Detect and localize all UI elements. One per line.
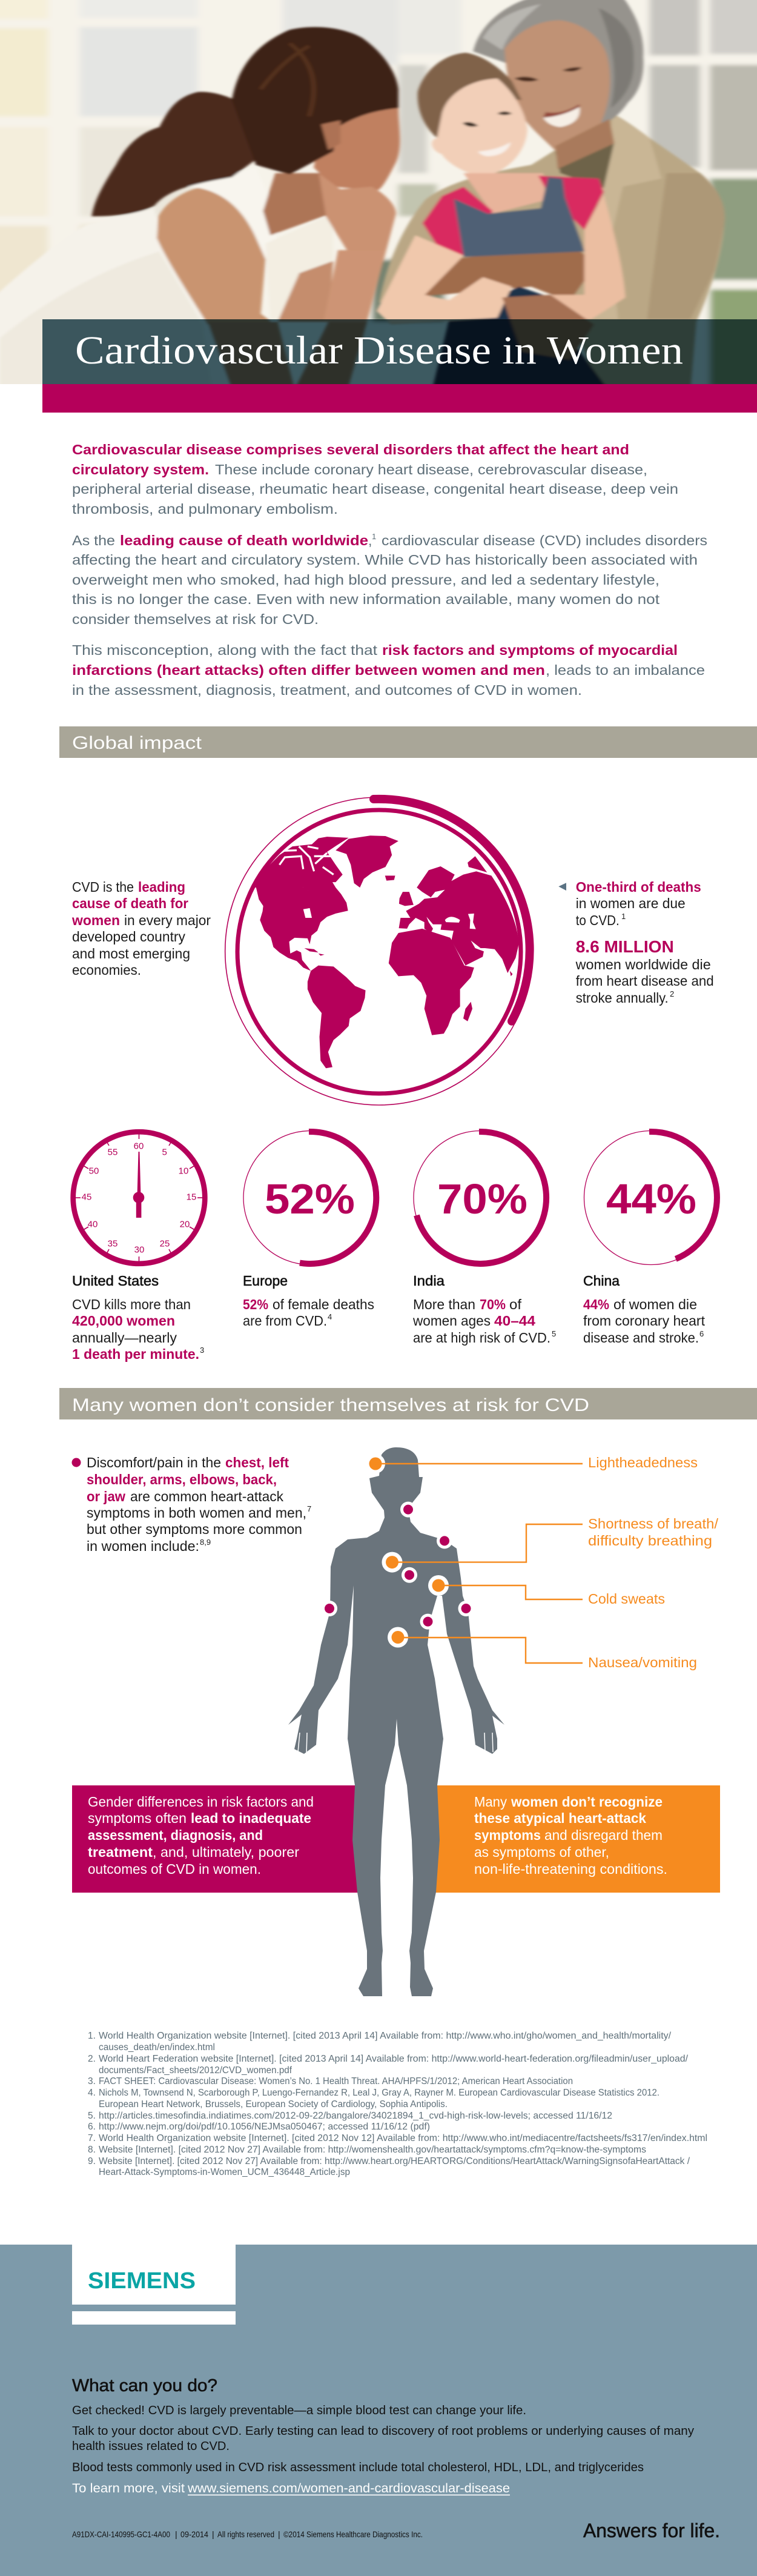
magenta band [42, 384, 757, 413]
chart: United States stopwatch [73, 1132, 205, 1264]
text: leading cause of death: in every major [124, 912, 211, 928]
child hair [418, 53, 521, 138]
paragraph 2: consider themselves at risk for CVD. [72, 611, 319, 627]
paragraph 1 [72, 442, 678, 517]
icon: pointer arrow [558, 883, 566, 891]
mother ponytail [92, 92, 263, 216]
child pink shirt [423, 187, 492, 257]
paragraph 2: affecting the heart and circulatory system. While CVD has historically been associated with [72, 552, 698, 568]
mother arm and shoulder [157, 185, 276, 325]
legal line: A91DX-CAI-140995-GC1-4A00 [72, 2529, 170, 2539]
title banner overlay [42, 319, 757, 384]
text: leading cause of death [71, 879, 211, 978]
text: leading cause of death: cause of death for [72, 895, 188, 911]
callout: one-third of deaths: women worldwide die [575, 957, 711, 972]
one-third arc [374, 799, 530, 1021]
legal line [72, 2529, 423, 2539]
body silhouette [288, 1447, 504, 1996]
text: common symptoms bullet: chest, left [225, 1455, 289, 1470]
text: common symptoms bullet: 8,9 [200, 1538, 211, 1547]
callout: one-third of deaths [558, 879, 714, 1006]
legal line: | [212, 2529, 214, 2539]
child arms [377, 235, 512, 325]
chart: China 44% ring: 44% [606, 1175, 696, 1223]
callout: one-third of deaths: stroke annually. [576, 990, 669, 1006]
inner ring [237, 810, 521, 1094]
mother neck and face [263, 173, 338, 235]
stopwatch numbers: 55 [108, 1147, 117, 1157]
paragraph 2: overweight men who smoked, had high blood pressure, and led a sedentary lifestyle, [72, 572, 659, 588]
text: United States: 420,000 women [72, 1313, 175, 1329]
stopwatch numbers: 25 [160, 1238, 170, 1249]
grandmother hand [502, 295, 594, 360]
child denim overalls [454, 177, 584, 257]
text: Europe: 4 [328, 1312, 332, 1321]
text: India [412, 1273, 556, 1346]
legal line: 09-2014 [180, 2529, 208, 2539]
mother collar [183, 168, 280, 260]
paragraph 1: circulatory system. [72, 462, 209, 477]
callout: gender differences (magenta box): lead to inadequate [191, 1810, 311, 1826]
text: United States: CVD kills more than [72, 1296, 191, 1312]
callout: atypical symptoms (orange box): women don’t recognize [511, 1794, 663, 1810]
references list: 9. [88, 2156, 96, 2166]
text: United States: 3 [200, 1346, 204, 1355]
callout: one-third of deaths: One-third of deaths [576, 879, 701, 895]
callout: atypical symptoms (orange box): symptoms [474, 1827, 541, 1843]
text: China: 44% [583, 1296, 609, 1312]
text: United States: 1 death per minute. [72, 1346, 199, 1362]
chart: India 70% ring [414, 1130, 547, 1265]
text: Europe: are from CVD. [243, 1313, 327, 1329]
footer panel [0, 2245, 757, 2576]
references list: 6. [88, 2122, 96, 2132]
references list: FACT SHEET: Cardiovascular Disease: Women’s No. 1 Health Threat. AHA/HPFS/1/2012; American Heart Association [99, 2076, 573, 2086]
intro text block [72, 442, 707, 698]
stopwatch numbers: 60 [134, 1141, 144, 1151]
text: India: are at high risk of CVD. [413, 1330, 550, 1346]
paragraph 2: leading cause of death worldwide [120, 533, 368, 548]
grandmother face [504, 20, 610, 156]
stopwatch numbers: 10 [179, 1166, 188, 1177]
paragraph 1: thrombosis, and pulmonary embolism. [72, 501, 338, 517]
text: leading cause of death: leading [138, 879, 185, 895]
references list: Website [Internet]. [cited 2012 Nov 27] Available from: http://womenshealth.gov/heartattack/symptoms.cfm?q=know-the-symptoms [99, 2145, 646, 2155]
references list: Website [Internet]. [cited 2012 Nov 27] Available from: http://www.heart.org/HEARTORG/Conditions/HeartAttack/WarningSignsofaHeartAttack / [99, 2156, 690, 2166]
leg gap over boxes [380, 1719, 413, 1999]
world map [253, 835, 519, 1068]
callout: gender differences (magenta box): outcomes of CVD in women. [88, 1861, 261, 1877]
references list: 3. [88, 2076, 96, 2086]
references list: 5. [88, 2111, 96, 2121]
text: Europe: of female deaths [273, 1296, 374, 1312]
paragraph 1: peripheral arterial disease, rheumatic heart disease, congenital heart disease, deep vein [72, 481, 678, 497]
section heading: Global impact [59, 726, 757, 758]
chart: China 44% ring [584, 1130, 718, 1265]
text: India: 70% [480, 1296, 506, 1312]
references list: 4. [88, 2088, 96, 2098]
label: shortness of breath: difficulty breathing [588, 1533, 712, 1549]
callout: atypical symptoms (orange box): Many [474, 1794, 507, 1810]
references list: Nichols M, Townsend N, Scarborough P, Luengo-Fernandez R, Leal J, Gray A, Rayner M. European Cardiovascular Disease Statistics 2012. [99, 2088, 659, 2098]
text: leading cause of death: developed country [72, 929, 185, 944]
logo panel: SIEMENS [88, 2268, 196, 2294]
text: China [583, 1273, 706, 1346]
advice text: Blood tests commonly used in CVD risk assessment include total cholesterol, HDL, LDL, and triglycerides [72, 2460, 644, 2474]
learn more link: To learn more, visit [72, 2481, 185, 2495]
text: China: disease and stroke. [583, 1330, 699, 1346]
chart: Europe 52% ring [243, 1130, 377, 1265]
North America and arctic islands [253, 837, 349, 971]
paragraph 1: These include coronary heart disease, cerebrovascular disease, [215, 462, 647, 477]
references list: 7. [88, 2133, 96, 2143]
advice text: Get checked! CVD is largely preventable—a simple blood test can change your life. [72, 2403, 526, 2417]
paragraph 2: cardiovascular disease (CVD) includes disorders [382, 533, 707, 548]
mother shirt [0, 208, 232, 390]
callout: atypical symptoms (orange box): non-life-threatening conditions. [474, 1861, 667, 1877]
text: leading cause of death: economies. [72, 962, 141, 978]
chart: Europe 52% ring: 52% [265, 1175, 355, 1223]
legal line: All rights reserved [217, 2529, 274, 2539]
text: United States [72, 1273, 204, 1362]
text: India: 40–44 [494, 1313, 535, 1329]
child face [432, 78, 527, 177]
learn more link: www.siemens.com/women-and-cardiovascular-disease [187, 2481, 510, 2495]
icon: bullet [71, 1458, 81, 1467]
heading: what can you do: What can you do? [72, 2376, 217, 2395]
symptom markers: pain points [322, 1502, 474, 1630]
callout: gender differences (magenta box): Gender differences in risk factors and [88, 1794, 314, 1810]
legal line: | [278, 2529, 280, 2539]
callout: gender differences (magenta box): symptoms often [88, 1810, 187, 1826]
stopwatch numbers: 35 [108, 1238, 117, 1249]
stopwatch numbers: 30 [134, 1244, 144, 1255]
text: common symptoms bullet: are common heart-attack [130, 1489, 283, 1504]
hero photo: mother, daughter and grandmother [0, 0, 757, 390]
label: lightheadedness: Lightheadedness [588, 1455, 698, 1470]
callout: one-third of deaths: in women are due [576, 895, 686, 911]
callout: gender differences (magenta box): assessment, diagnosis, and [88, 1827, 263, 1843]
callout: atypical symptoms (orange box): as symptoms of other, [474, 1844, 609, 1860]
label: shortness of breath [588, 1516, 719, 1549]
symptom markers: atypical points [366, 1454, 449, 1648]
text: United States: United States [72, 1273, 159, 1289]
references list: World Health Organization website [Internet]. [cited 2012 Nov 12] Available from: http://www.who.int/mediacentre/factsheets/fs317/en/index.html [99, 2133, 707, 2143]
mother hand [319, 173, 396, 251]
mother hair [232, 27, 398, 174]
title: Cardiovascular Disease in Women [75, 328, 683, 373]
symptom labels [588, 1455, 719, 1670]
callout: atypical symptoms (orange box) [430, 1785, 720, 1893]
references list: causes_death/en/index.html [99, 2042, 215, 2053]
paragraph 3: , leads to an imbalance [546, 662, 705, 678]
text: Europe: Europe [243, 1273, 288, 1289]
logo panel [72, 2245, 236, 2325]
paragraph 2: As the [72, 533, 115, 548]
text: common symptoms bullet: or jaw [87, 1489, 125, 1504]
text: India: 5 [552, 1329, 556, 1338]
stopwatch numbers: 15 [187, 1192, 196, 1202]
paragraph 2: , [368, 533, 372, 548]
stopwatch hand [133, 1152, 144, 1218]
text: leading cause of death: women [71, 912, 120, 928]
label: shortness of breath: Shortness of breath/ [588, 1516, 719, 1532]
advice text: health issues related to CVD. [72, 2439, 230, 2453]
text: India: More than [413, 1296, 475, 1312]
paragraph 2 [72, 532, 707, 627]
references list: World Heart Federation website [Internet]. [cited 2013 April 14] Available from: http://www.world-heart-federation.org/fileadmin/user_upload/ [99, 2054, 689, 2064]
text: China: China [583, 1273, 620, 1289]
paragraph 3 [72, 642, 705, 698]
references list: World Health Organization website [Internet]. [cited 2013 April 14] Available from: http://www.who.int/gho/women_and_health/mortality/ [99, 2031, 672, 2041]
callout: one-third of deaths: from heart disease and [576, 973, 714, 989]
text: common symptoms bullet [71, 1455, 311, 1554]
text: leading cause of death: and most emerging [72, 946, 190, 961]
text: Europe [243, 1273, 374, 1329]
callout: gender differences (magenta box): treatment [88, 1844, 153, 1860]
grandmother hair [473, 0, 644, 123]
paragraph 2: this is no longer the case. Even with new information available, many women do not [72, 591, 660, 607]
callout: one-third of deaths: to CVD. [576, 912, 620, 928]
section heading: Global impact: Global impact [72, 733, 202, 753]
text: India: women ages [412, 1313, 491, 1329]
references list: 1. [88, 2031, 96, 2041]
text: common symptoms bullet: but other symptoms more common [87, 1521, 302, 1537]
child neck [464, 173, 546, 214]
label: cold sweats: Cold sweats [588, 1591, 665, 1607]
text: common symptoms bullet: shoulder, arms, elbows, back, [87, 1472, 277, 1487]
grandmother forearm [425, 251, 586, 297]
references list: 2. [88, 2054, 96, 2064]
advice text [72, 2403, 695, 2474]
tagline: Answers for life. [583, 2520, 720, 2541]
callout: one-third of deaths: 8.6 MILLION [576, 937, 674, 956]
callout: gender differences (magenta box) [72, 1785, 363, 1893]
text: common symptoms bullet: 7 [307, 1504, 311, 1513]
text: United States: annually—nearly [72, 1330, 177, 1346]
stopwatch ticks [73, 1132, 205, 1264]
references list: documents/Fact_sheets/2012/CVD_women.pdf [99, 2065, 293, 2076]
globe: world map with one-third ring [225, 797, 533, 1105]
grandmother jacket [379, 113, 725, 390]
references list: http://www.nejm.org/doi/pdf/10.1056/NEJMsa050467; accessed 11/16/12 (pdf) [99, 2122, 430, 2132]
stopwatch numbers: 45 [82, 1192, 91, 1202]
label: nausea: Nausea/vomiting [588, 1655, 697, 1670]
paragraph 3: infarctions (heart attacks) often differ between women and men [72, 662, 545, 678]
references list [88, 2031, 707, 2177]
stopwatch numbers: 50 [89, 1166, 99, 1177]
symptom leader lines [375, 1464, 583, 1663]
text: leading cause of death: CVD is the [72, 879, 134, 895]
paragraph 1: Cardiovascular disease comprises several disorders that affect the heart and [72, 442, 629, 457]
references list: http://articles.timesofindia.indiatimes.com/2012-09-22/bangalore/34021894_1_cvd-high-risk-low-levels; accessed 11/16/12 [99, 2111, 612, 2121]
text: Europe: 52% [243, 1296, 268, 1312]
stopwatch numbers [82, 1141, 196, 1255]
text: China: of women die [613, 1296, 697, 1312]
callout: one-third of deaths: 2 [670, 989, 674, 998]
references list: Heart-Attack-Symptoms-in-Women_UCM_436448_Article.jsp [99, 2167, 350, 2177]
section heading: Many women don't consider themselves at risk: Many women don’t consider themselves at risk for CVD [72, 1395, 589, 1415]
text: common symptoms bullet: in women include: [87, 1538, 199, 1554]
paragraph 3: This misconception, along with the fact that [72, 642, 378, 658]
references list: 8. [88, 2145, 96, 2155]
text: China: 6 [699, 1329, 704, 1338]
stopwatch numbers: 40 [88, 1219, 98, 1230]
legal line: ©2014 Siemens Healthcare Diagnostics Inc. [283, 2529, 423, 2539]
callout: atypical symptoms (orange box): and disregard them [544, 1827, 663, 1843]
paragraph 2: 1 [372, 532, 376, 541]
advice text: Talk to your doctor about CVD. Early testing can lead to discovery of root problems or underlying causes of many [72, 2424, 695, 2438]
callout: atypical symptoms (orange box): these atypical heart-attack [474, 1810, 646, 1826]
callout: one-third of deaths: 1 [621, 912, 626, 921]
window background [0, 0, 757, 390]
callout: gender differences (magenta box): , and, ultimately, poorer [153, 1844, 299, 1860]
paragraph 3: in the assessment, diagnosis, treatment, and outcomes of CVD in women. [72, 682, 582, 698]
section heading: Many women don't consider themselves at risk [59, 1388, 757, 1419]
stopwatch numbers: 5 [162, 1147, 167, 1157]
chart: India 70% ring: 70% [437, 1175, 527, 1223]
legal line: | [175, 2529, 177, 2539]
text: India: of [509, 1296, 522, 1312]
text: China: from coronary heart [583, 1313, 706, 1329]
text: India: India [413, 1273, 445, 1289]
figure: female body silhouette with symptoms [288, 1447, 583, 1999]
paragraph 3: risk factors and symptoms of myocardial [382, 642, 678, 658]
stopwatch numbers: 20 [180, 1219, 190, 1230]
text: common symptoms bullet: Discomfort/pain in the [87, 1455, 221, 1470]
outer thin ring [225, 797, 533, 1105]
text: common symptoms bullet: symptoms in both women and men, [87, 1505, 306, 1521]
references list: European Heart Network, Brussels, European Society of Cardiology, Sophia Antipolis. [99, 2099, 448, 2110]
